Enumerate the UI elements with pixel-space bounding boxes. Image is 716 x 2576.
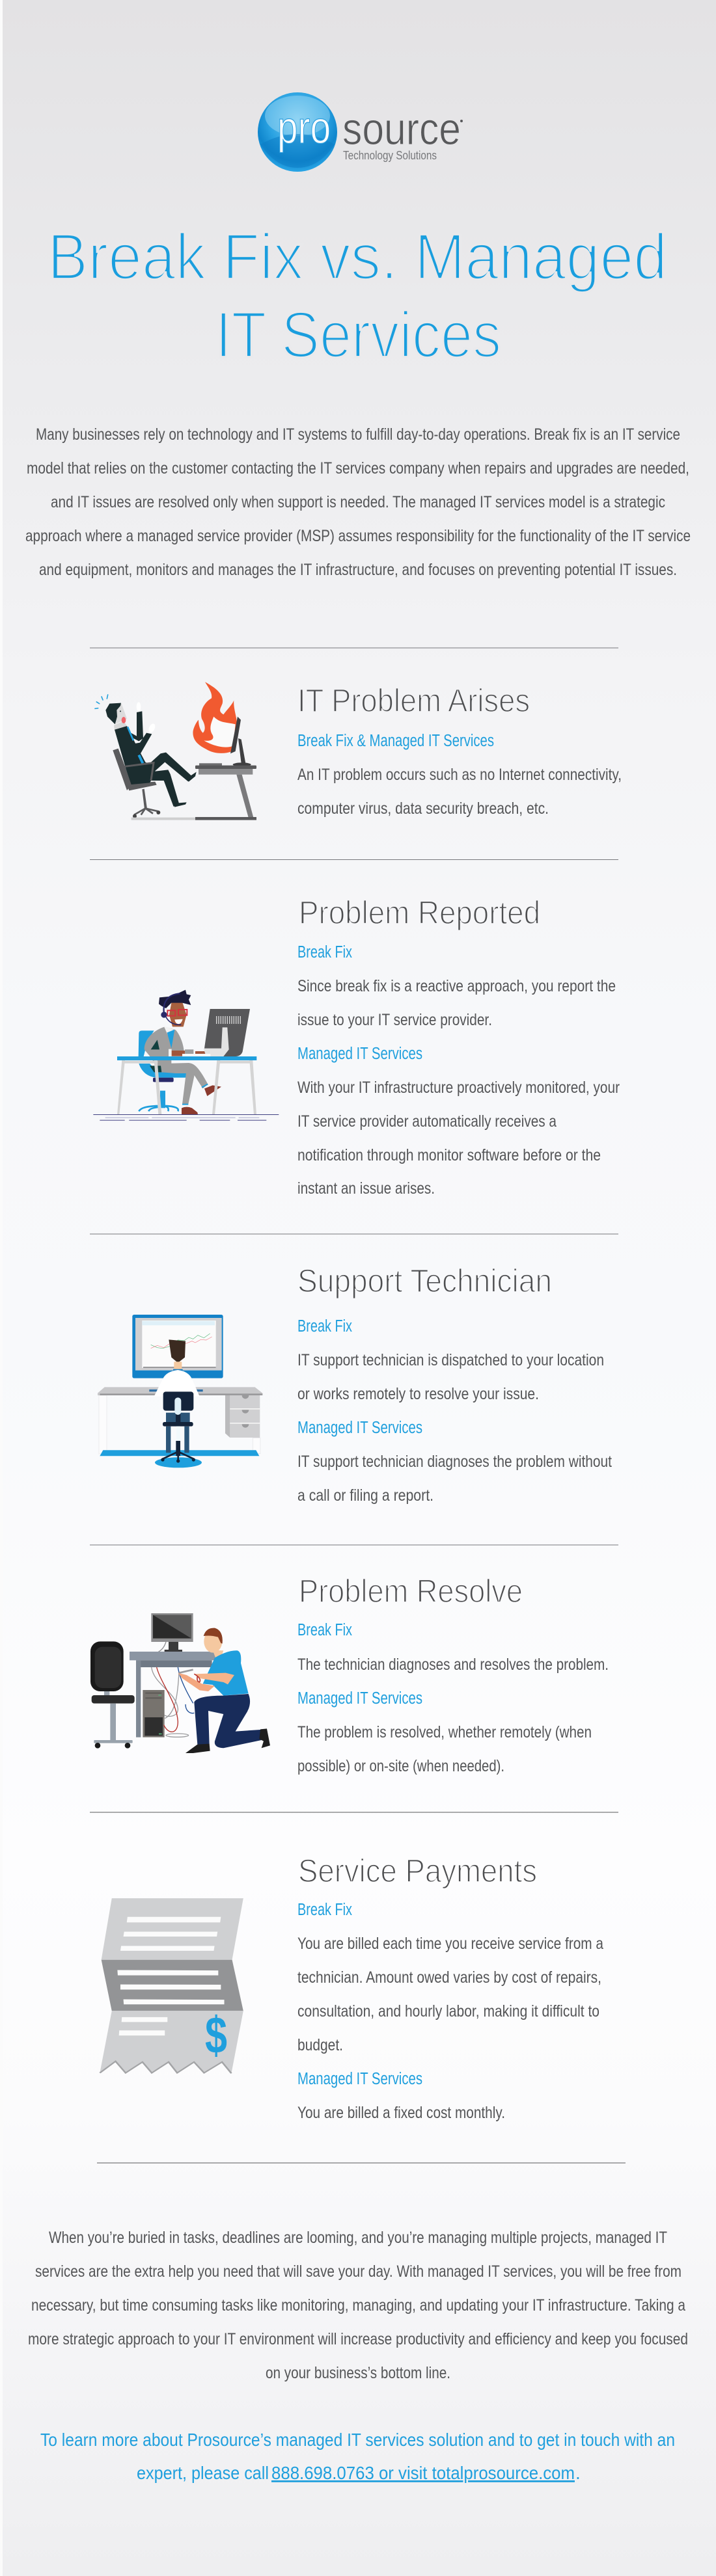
- body text: An IT problem occurs such as no Internet connectivity,: [297, 766, 622, 784]
- heading: Problem Resolve: [299, 1573, 523, 1609]
- body text: Break Fix: issue to your IT service provider.: [297, 1011, 492, 1029]
- body text: Break Fix: [297, 1351, 604, 1403]
- intro paragraph: [25, 425, 691, 579]
- body text: Managed IT Services: You are billed a fixed cost monthly.: [297, 2104, 505, 2122]
- icon: panicked man and burning computer: [95, 682, 256, 820]
- heading: Service Payments: [298, 1853, 537, 1889]
- subheading: Break Fix: Break Fix: [297, 943, 352, 961]
- panel: Problem Resolve: [90, 1573, 609, 1775]
- subheading: Managed IT Services: Managed IT Services: [297, 1689, 422, 1708]
- icon: folded invoice with dollar sign: $: [205, 2006, 227, 2064]
- body text: Break Fix: or works remotely to resolve your issue.: [297, 1385, 539, 1403]
- call to action: .: [575, 2463, 581, 2483]
- icon: smiling man with headset at desk: [93, 990, 279, 1121]
- logo: Prosource Technology Solutions: Technology Solutions: [343, 149, 437, 162]
- body text: Break Fix: You are billed each time you receive service from a: [297, 1935, 603, 1953]
- heading: IT Problem Arises: [297, 682, 530, 719]
- title: IT Services: [215, 299, 501, 371]
- subheading: Break Fix: Break Fix: [297, 1901, 352, 1919]
- body text: Managed IT Services: [297, 1453, 612, 1505]
- body text: Managed IT Services: notification through monitor software before or the: [297, 1146, 601, 1164]
- body text: [297, 766, 622, 818]
- body text: Break Fix: [297, 977, 616, 1029]
- subheading: Break Fix: Break Fix: [297, 1621, 352, 1639]
- subheading: Managed IT Services: Managed IT Services: [297, 1045, 422, 1063]
- body text: Managed IT Services: instant an issue arises.: [297, 1179, 435, 1198]
- panel: Service Payments: [100, 1853, 603, 2122]
- call to action: [40, 2430, 675, 2483]
- body text: Managed IT Services: With your IT infrastructure proactively monitored, your: [297, 1079, 620, 1097]
- closing paragraph: on your business’s bottom line.: [266, 2364, 450, 2382]
- heading: Problem Reported: [299, 894, 540, 931]
- body text: Break Fix: consultation, and hourly labor, making it difficult to: [297, 2002, 599, 2020]
- body text: Break Fix: technician. Amount owed varies by cost of repairs,: [297, 1968, 601, 1987]
- panel: Support Technician: [98, 1263, 612, 1505]
- body text: Managed IT Services: The problem is resolved, whether remotely (when: [297, 1723, 592, 1741]
- body text: Break Fix: Since break fix is a reactive approach, you report the: [297, 977, 616, 995]
- body text: Managed IT Services: [297, 1723, 592, 1775]
- body text: Managed IT Services: a call or filing a report.: [297, 1486, 434, 1505]
- call to action: 888.698.0763 or visit totalprosource.com: [271, 2463, 575, 2483]
- title: [48, 221, 667, 371]
- subheading: Managed IT Services: Managed IT Services: [297, 1419, 422, 1437]
- body text: Break Fix: budget.: [297, 2036, 343, 2054]
- body text: computer virus, data security breach, etc.: [297, 799, 549, 818]
- body text: Managed IT Services: possible) or on-site (when needed).: [297, 1757, 504, 1775]
- icon: folded invoice with dollar sign: [100, 1898, 243, 2073]
- call to action: expert, please call: [137, 2463, 269, 2483]
- heading: Support Technician: [297, 1263, 552, 1299]
- title: Break Fix vs. Managed: [48, 221, 667, 293]
- subheading: Break Fix: Break Fix: [297, 1317, 352, 1335]
- logo: Prosource Technology Solutions: pro: [277, 102, 331, 153]
- closing paragraph: [28, 2229, 688, 2382]
- icon: technician at monitor seen from behind: [98, 1315, 262, 1468]
- body text: Break Fix: [297, 1935, 603, 2054]
- subheading: Break Fix & Managed IT Services: [297, 732, 494, 750]
- body text: Managed IT Services: IT service provider automatically receives a: [297, 1112, 557, 1131]
- panel: Problem Reported: [93, 894, 620, 1198]
- panel: IT Problem Arises: [95, 682, 622, 820]
- body text: Break Fix: The technician diagnoses and resolves the problem.: [297, 1656, 609, 1674]
- logo: Prosource Technology Solutions: source: [342, 103, 461, 154]
- body text: Break Fix: IT support technician is dispatched to your location: [297, 1351, 604, 1369]
- icon: technician repairing cables under desk: [90, 1613, 270, 1753]
- subheading: Managed IT Services: Managed IT Services: [297, 2070, 422, 2088]
- body text: Managed IT Services: [297, 1079, 620, 1198]
- logo: Prosource Technology Solutions: [258, 92, 463, 172]
- body text: Managed IT Services: IT support technician diagnoses the problem without: [297, 1453, 612, 1471]
